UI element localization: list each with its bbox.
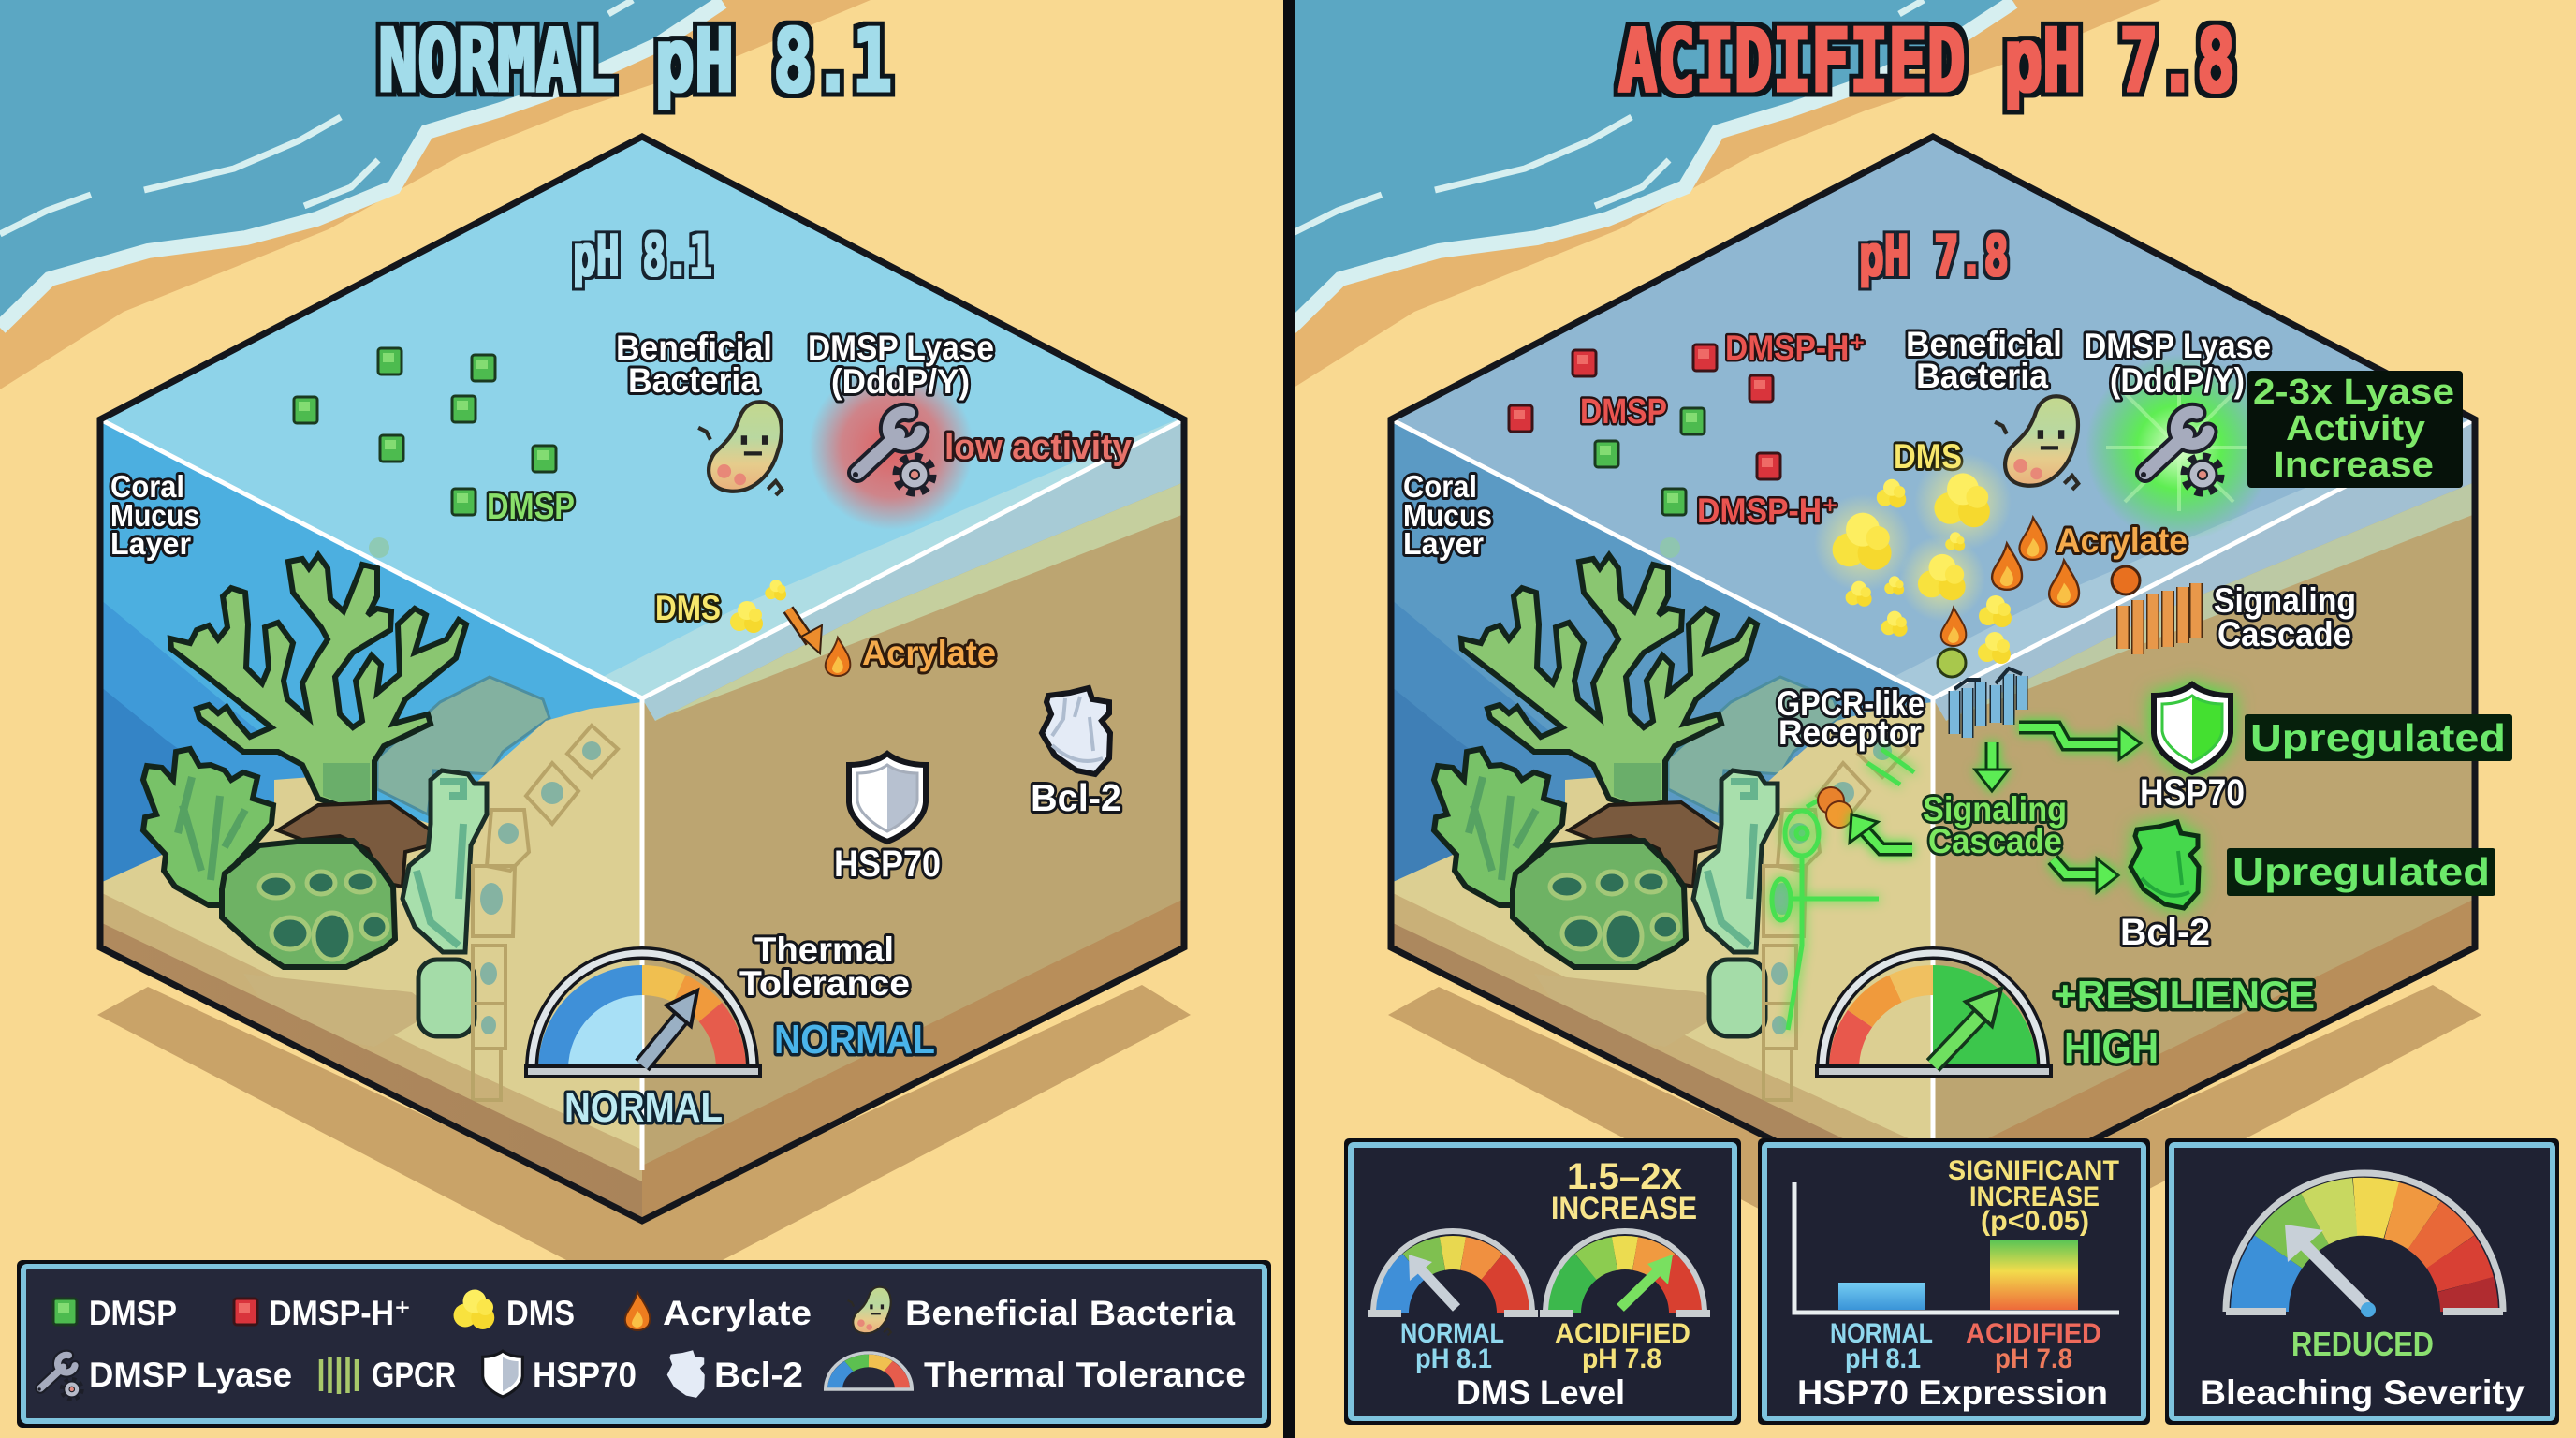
label: DMSP lyase: (DddP/Y) [2110, 361, 2245, 400]
icon: wrench [2141, 412, 2219, 492]
legend icon: GPCR [321, 1357, 357, 1394]
reef scene [100, 537, 642, 1185]
gauge: normal DMS [1368, 1231, 1538, 1313]
right sediment face [1933, 419, 2475, 1221]
icon: orange signaling receptor [2123, 583, 2196, 654]
label: coral mucus layer: Coral [1403, 469, 1477, 504]
label: Bcl-2: Bcl-2 [2120, 912, 2210, 953]
callout: 1.5-2x increase: INCREASE [1551, 1191, 1697, 1226]
protonated DMSP particles [1509, 345, 1780, 479]
label: acidified pH 7.8: ACIDIFIED [1555, 1318, 1690, 1349]
label: GPCR-like receptor: GPCR-like [1777, 684, 1925, 723]
panel title: DMS level: DMS Level [1456, 1373, 1625, 1412]
icon: Bcl-2 heart [1042, 688, 1110, 774]
label: DMS: DMS [1894, 437, 1962, 476]
callout: 1.5-2x increase [1551, 1156, 1697, 1226]
legend text: HSP70: HSP70 [533, 1356, 637, 1394]
callout: significant increase: SIGNIFICANT [1948, 1155, 2119, 1186]
label: normal pH 8.1: NORMAL [1830, 1318, 1933, 1349]
label: acrylate: Acrylate [2056, 521, 2188, 560]
label: coral mucus layer: Mucus [1403, 498, 1492, 533]
deep water band [1391, 686, 1572, 889]
label: normal pH 8.1 [1830, 1318, 1933, 1374]
label: DMSP: DMSP [487, 487, 575, 527]
label: DMSP lyase [808, 329, 994, 401]
callout: lyase increase [2247, 371, 2463, 488]
legend text: beneficial bacteria: Beneficial Bacteria [905, 1294, 1235, 1332]
mid water band [100, 599, 318, 889]
reef scene [1391, 537, 1933, 1185]
title: acidified: ACIDIFIED pH 7.8 [1618, 10, 2235, 111]
label: upregulated Bcl-2: Upregulated [2232, 850, 2490, 893]
arrow: receptor down to cascade [1975, 742, 2009, 791]
shallow shore strip below edge [642, 419, 1184, 721]
callout: significant increase: INCREASE [1969, 1181, 2100, 1212]
legend icon: bacterium [848, 1287, 891, 1335]
legend icon: acrylate [625, 1292, 650, 1330]
DMS cloud with glow [1814, 453, 2012, 664]
arrow: cascade to Bcl-2 [2053, 858, 2118, 892]
deep water band [100, 686, 281, 889]
legend text: DMSP: DMSP [89, 1294, 177, 1332]
label: GPCR-like receptor: Receptor [1778, 713, 1922, 752]
icon: HSP70 shield [2154, 684, 2231, 772]
label: signaling cascade green: Cascade [1928, 822, 2062, 860]
callout: significant increase: (p<0.05) [1981, 1206, 2089, 1237]
normal cube labels and icons [110, 224, 1132, 1131]
callout: significant increase [1948, 1155, 2119, 1237]
label: GPCR-like receptor [1777, 684, 1925, 752]
label: Bcl-2: Bcl-2 [1031, 776, 1121, 819]
label: DMSP-H+ top: DMSP-H⁺ [1725, 329, 1866, 367]
legend text: thermal tolerance: Thermal Tolerance [924, 1356, 1246, 1394]
icon: DMS particles [730, 580, 786, 633]
icon: red glow [809, 365, 973, 530]
right sediment face [642, 419, 1184, 1221]
background: normal panel sand [0, 0, 1284, 1438]
label: acidified pH 7.8: pH 7.8 [1582, 1343, 1661, 1374]
label: beneficial bacteria: Beneficial [616, 329, 772, 367]
label: coral mucus layer [110, 469, 199, 561]
base band right [642, 899, 1184, 1221]
legend icon: DMS [453, 1290, 494, 1329]
legend icon: shield [483, 1351, 522, 1397]
cube ground shadow [1388, 985, 2481, 1260]
title: normal: NORMAL pH 8.1 [378, 10, 892, 111]
icon: HSP70 shield [849, 754, 926, 842]
label: DMSP lyase: (DddP/Y) [831, 362, 970, 401]
callout: 1.5-2x increase: 1.5–2x [1567, 1156, 1682, 1197]
base band left [100, 922, 642, 1221]
arrow: DMS to acrylate [788, 609, 822, 653]
callout: lyase increase: 2-3x Lyase [2253, 373, 2454, 412]
icon: Bcl-2 heart green [2130, 822, 2199, 908]
gauge: bleaching severity [2226, 1173, 2503, 1317]
cube outline [1391, 137, 2475, 1221]
top water surface [1391, 137, 2475, 698]
label: coral mucus layer: Mucus [110, 498, 199, 533]
label: beneficial bacteria [616, 329, 772, 400]
left shoreline and ocean [0, 0, 871, 389]
label: reduced: REDUCED [2291, 1325, 2434, 1363]
label: HSP70: HSP70 [834, 844, 941, 885]
label: coral mucus layer [1403, 469, 1492, 561]
top water surface [100, 137, 1184, 698]
green shore strip [1946, 482, 2475, 721]
label: DMSP lyase: DMSP Lyase [808, 329, 994, 367]
label: signaling cascade green: Signaling [1923, 790, 2067, 829]
legend text: DMSP-H+: DMSP-H⁺ [269, 1294, 411, 1332]
left water face [1391, 419, 1933, 1221]
shallow shore strip above edge [1890, 417, 2475, 698]
label: HSP70: HSP70 [2140, 772, 2245, 814]
pH label: pH 7.8 [1859, 224, 2009, 289]
label: coral mucus layer: Coral [110, 469, 184, 504]
base band right [1933, 899, 2475, 1221]
label: signaling cascade top [2214, 581, 2356, 653]
panel: HSP70 expression [1758, 1138, 2150, 1425]
background: acidified panel sand [1294, 0, 2576, 1438]
icon: acrylate flame [826, 638, 850, 676]
label: acidified pH 7.8 [1966, 1318, 2101, 1374]
legend icon: heart [667, 1350, 705, 1398]
mid water band [1391, 599, 1609, 889]
pH label: pH 8.1 [573, 224, 712, 289]
label: normal pH 8.1 [1400, 1318, 1504, 1374]
panel: bleaching severity [2165, 1138, 2559, 1425]
label: NORMAL pale: NORMAL [564, 1085, 723, 1131]
label: NORMAL blue: NORMAL [774, 1017, 935, 1063]
label: upregulated HSP70: Upregulated [2250, 716, 2506, 759]
bar chart [1794, 1182, 2119, 1313]
label: DMSP-H+ lower: DMSP-H⁺ [1697, 492, 1838, 530]
legend icon: DMSP [53, 1299, 77, 1325]
legend text: GPCR: GPCR [372, 1356, 456, 1394]
white glass edges [100, 419, 1184, 1170]
gauge: thermal tolerance normal [526, 953, 760, 1077]
label: low activity: low activity [944, 428, 1132, 467]
label: coral mucus layer: Layer [1403, 526, 1484, 561]
panel: acidified pH cube [1388, 137, 2481, 1260]
legend text: Bcl-2: Bcl-2 [714, 1356, 803, 1394]
callout: lyase increase: Activity [2286, 409, 2425, 448]
gauge: thermal tolerance high [1817, 953, 2051, 1077]
label: DMSP lyase: DMSP Lyase [2084, 327, 2271, 365]
shallow shore strip above edge [599, 417, 1184, 698]
icon: bacterium [1995, 396, 2078, 490]
panel: DMS level [1344, 1138, 1741, 1425]
label: DMS: DMS [655, 589, 721, 627]
legend icon: mini gauge [826, 1353, 912, 1389]
arrow: receptor to HSP70 [2019, 727, 2141, 759]
label: thermal tolerance: Thermal [754, 931, 894, 969]
label: acrylate: Acrylate [862, 634, 996, 672]
DMSP particles [1595, 408, 1705, 515]
label: beneficial bacteria: Bacteria [1916, 357, 2048, 395]
label: beneficial bacteria: Bacteria [628, 361, 759, 400]
label: signaling cascade top: Signaling [2214, 581, 2356, 620]
legend text: DMSP lyase: DMSP Lyase [89, 1356, 292, 1394]
label: acidified pH 7.8: pH 7.8 [1995, 1343, 2072, 1374]
label: thermal tolerance [739, 931, 910, 1003]
acidified cube labels and icons [1403, 224, 2512, 1077]
legend icon: DMSP-H+ [234, 1299, 257, 1325]
cube ground shadow [97, 985, 1191, 1260]
label: thermal tolerance: Tolerance [739, 964, 910, 1003]
legend icon: wrench [37, 1355, 81, 1399]
label: DMSP lyase [2084, 327, 2271, 400]
panel title: bleaching severity: Bleaching Severity [2200, 1373, 2525, 1412]
label: beneficial bacteria [1906, 325, 2062, 395]
panel: legend [17, 1260, 1271, 1428]
legend text: DMS: DMS [506, 1294, 575, 1332]
acrylate flames [1938, 518, 2140, 677]
label: acidified pH 7.8: ACIDIFIED [1966, 1318, 2101, 1349]
left water face [100, 419, 642, 1221]
shallow shore strip below edge [1933, 419, 2475, 721]
arrow: cascade to cell [1850, 814, 1912, 849]
icon: GPCR receptor [1954, 668, 2022, 738]
label: acidified pH 7.8 [1555, 1318, 1690, 1374]
label: beneficial bacteria: Beneficial [1906, 325, 2062, 363]
label: normal pH 8.1: pH 8.1 [1845, 1343, 1921, 1374]
label: normal pH 8.1: pH 8.1 [1415, 1343, 1492, 1374]
legend text: acrylate: Acrylate [663, 1294, 812, 1332]
callout: lyase increase: Increase [2274, 446, 2434, 485]
panel: normal pH cube [97, 137, 1191, 1260]
label: normal pH 8.1: NORMAL [1400, 1318, 1504, 1349]
label: DMSP red: DMSP [1580, 392, 1667, 432]
panel title: HSP70 expression: HSP70 Expression [1797, 1373, 2108, 1412]
right shoreline and ocean [1291, 0, 2161, 389]
label: resilience: +RESILIENCE [2054, 973, 2315, 1017]
white glass edges [1391, 419, 2475, 1170]
icon: wrench [853, 412, 931, 492]
base band left [1391, 922, 1933, 1221]
icon: target cell spot [1818, 787, 1852, 828]
glowing cell pathway [1772, 749, 1914, 1030]
divider between panels [1283, 0, 1295, 1438]
cube outline [100, 137, 1184, 1221]
label: coral mucus layer: Layer [110, 526, 191, 561]
label: signaling cascade green [1923, 790, 2067, 860]
icon: bacterium [698, 402, 782, 495]
label: signaling cascade top: Cascade [2217, 615, 2351, 653]
gauge: acidified DMS [1540, 1231, 1710, 1313]
DMSP particles [294, 348, 556, 515]
label: high: HIGH [2064, 1023, 2159, 1072]
icon: green glow [2086, 354, 2273, 541]
green shore strip [655, 482, 1184, 721]
